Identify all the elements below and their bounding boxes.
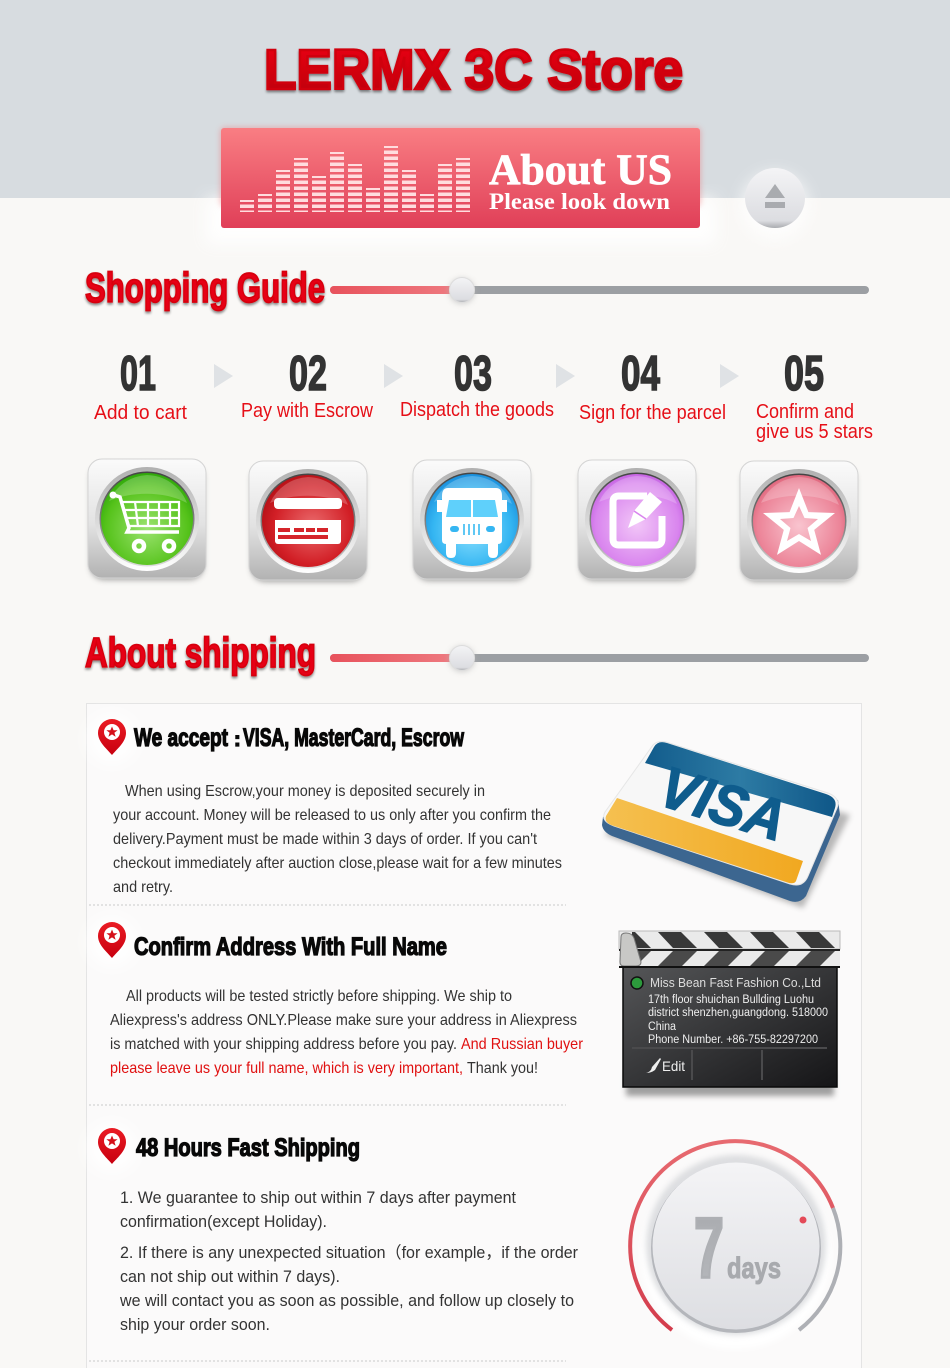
address: district shenzhen,guangdong. 518000 xyxy=(648,1007,828,1019)
step 03 xyxy=(400,347,554,421)
address: Phone Number. +86-755-82297200 xyxy=(648,1034,818,1046)
section heading: We accept xyxy=(134,724,229,752)
body text: All products will be tested strictly before shipping. We ship to xyxy=(126,988,512,1005)
body text: checkout immediately after auction close,please wait for a few minutes xyxy=(113,855,562,872)
number: 7 xyxy=(694,1201,724,1296)
step 03: 03 xyxy=(454,347,492,401)
banner: About US xyxy=(206,127,716,244)
step 02: Pay with Escrow xyxy=(241,400,373,422)
icon: visa card xyxy=(602,741,850,908)
step 04 xyxy=(579,347,726,424)
step 02: 02 xyxy=(289,347,327,401)
body text: 2. If there is any unexpected situation（for example，if the order xyxy=(120,1243,578,1262)
body text: please leave us your full name, which is very important, xyxy=(110,1060,463,1077)
heading: Shopping Guide: Shopping Guide xyxy=(85,264,325,311)
icon: location pin xyxy=(88,1124,136,1172)
arrow xyxy=(556,364,575,388)
edit button xyxy=(646,1058,685,1074)
section: 48 hours fast shipping xyxy=(88,1124,578,1334)
heading: About shipping: About shipping xyxy=(85,629,316,676)
section heading xyxy=(134,724,464,752)
body text: your account. Money will be released to us only after you confirm the xyxy=(113,807,551,824)
body text: ship your order soon. xyxy=(120,1316,270,1334)
step 05: Confirm and xyxy=(756,401,854,423)
company name: Miss Bean Fast Fashion Co.,Ltd xyxy=(650,975,821,990)
slider: shopping guide xyxy=(330,278,869,304)
body text: Aliexpress's address ONLY.Please make sure your address in Aliexpress xyxy=(110,1012,577,1029)
title: LERMX 3C Store xyxy=(264,38,683,102)
icon: star xyxy=(740,461,858,582)
edit button: Edit xyxy=(662,1058,685,1074)
visa logo: VISA xyxy=(652,754,794,854)
icon: bus xyxy=(413,460,531,581)
icon: credit card xyxy=(249,461,367,582)
chart: 7 days dial xyxy=(630,1141,840,1349)
arrow xyxy=(384,364,403,388)
body text xyxy=(110,988,584,1077)
icon: location pin xyxy=(88,715,136,763)
body text: When using Escrow,your money is deposited securely in xyxy=(125,783,485,800)
body text xyxy=(119,1189,578,1334)
banner heading: About US xyxy=(489,147,672,194)
section: confirm address xyxy=(88,918,584,1077)
section heading: VISA, MasterCard, Escrow xyxy=(243,724,464,752)
icon: shopping cart xyxy=(88,459,206,580)
icon: edit xyxy=(578,460,696,581)
banner subheading: Please look down xyxy=(489,189,670,214)
address xyxy=(648,994,828,1046)
slider: about shipping xyxy=(330,646,869,672)
step 04: Sign for the parcel xyxy=(579,402,726,424)
unit: days xyxy=(727,1252,781,1285)
body text: is matched with your shipping address before you pay. xyxy=(110,1036,457,1053)
section heading: 48 Hours Fast Shipping xyxy=(136,1134,360,1162)
step 05: 05 xyxy=(784,347,824,401)
arrow xyxy=(214,364,233,388)
step 05 xyxy=(756,347,873,443)
step 03: Dispatch the goods xyxy=(400,399,554,421)
step 01: 01 xyxy=(120,347,156,401)
arrow xyxy=(720,364,739,388)
body text: we will contact you as soon as possible, and follow up closely to xyxy=(119,1292,574,1310)
body text: confirmation(except Holiday). xyxy=(120,1213,327,1231)
icon: location pin xyxy=(88,918,136,966)
body text: 1. We guarantee to ship out within 7 days after payment xyxy=(120,1189,516,1207)
status dot xyxy=(631,977,643,989)
address: China xyxy=(648,1021,677,1033)
body text: and retry. xyxy=(113,879,173,896)
panel: about shipping content xyxy=(86,704,862,1368)
section heading: Confirm Address With Full Name xyxy=(134,933,447,961)
step 05: give us 5 stars xyxy=(756,421,873,443)
body text: And Russian buyer xyxy=(461,1036,584,1053)
step 01 xyxy=(94,347,187,424)
step 01: Add to cart xyxy=(94,402,187,424)
address: 17th floor shuichan Bullding Luohu xyxy=(648,994,814,1006)
step 04: 04 xyxy=(621,347,660,401)
step 02 xyxy=(241,347,373,422)
section heading: : xyxy=(234,729,241,751)
icon: eject button xyxy=(742,168,808,239)
body text: can not ship out within 7 days). xyxy=(120,1268,340,1286)
section: we accept xyxy=(88,715,562,896)
icon: clapperboard address card xyxy=(619,931,840,1096)
equalizer graphic xyxy=(240,146,470,212)
body text: Thank you! xyxy=(467,1060,538,1077)
body text xyxy=(113,783,562,896)
body text: delivery.Payment must be made within 3 days of order. If you can't xyxy=(113,831,538,848)
